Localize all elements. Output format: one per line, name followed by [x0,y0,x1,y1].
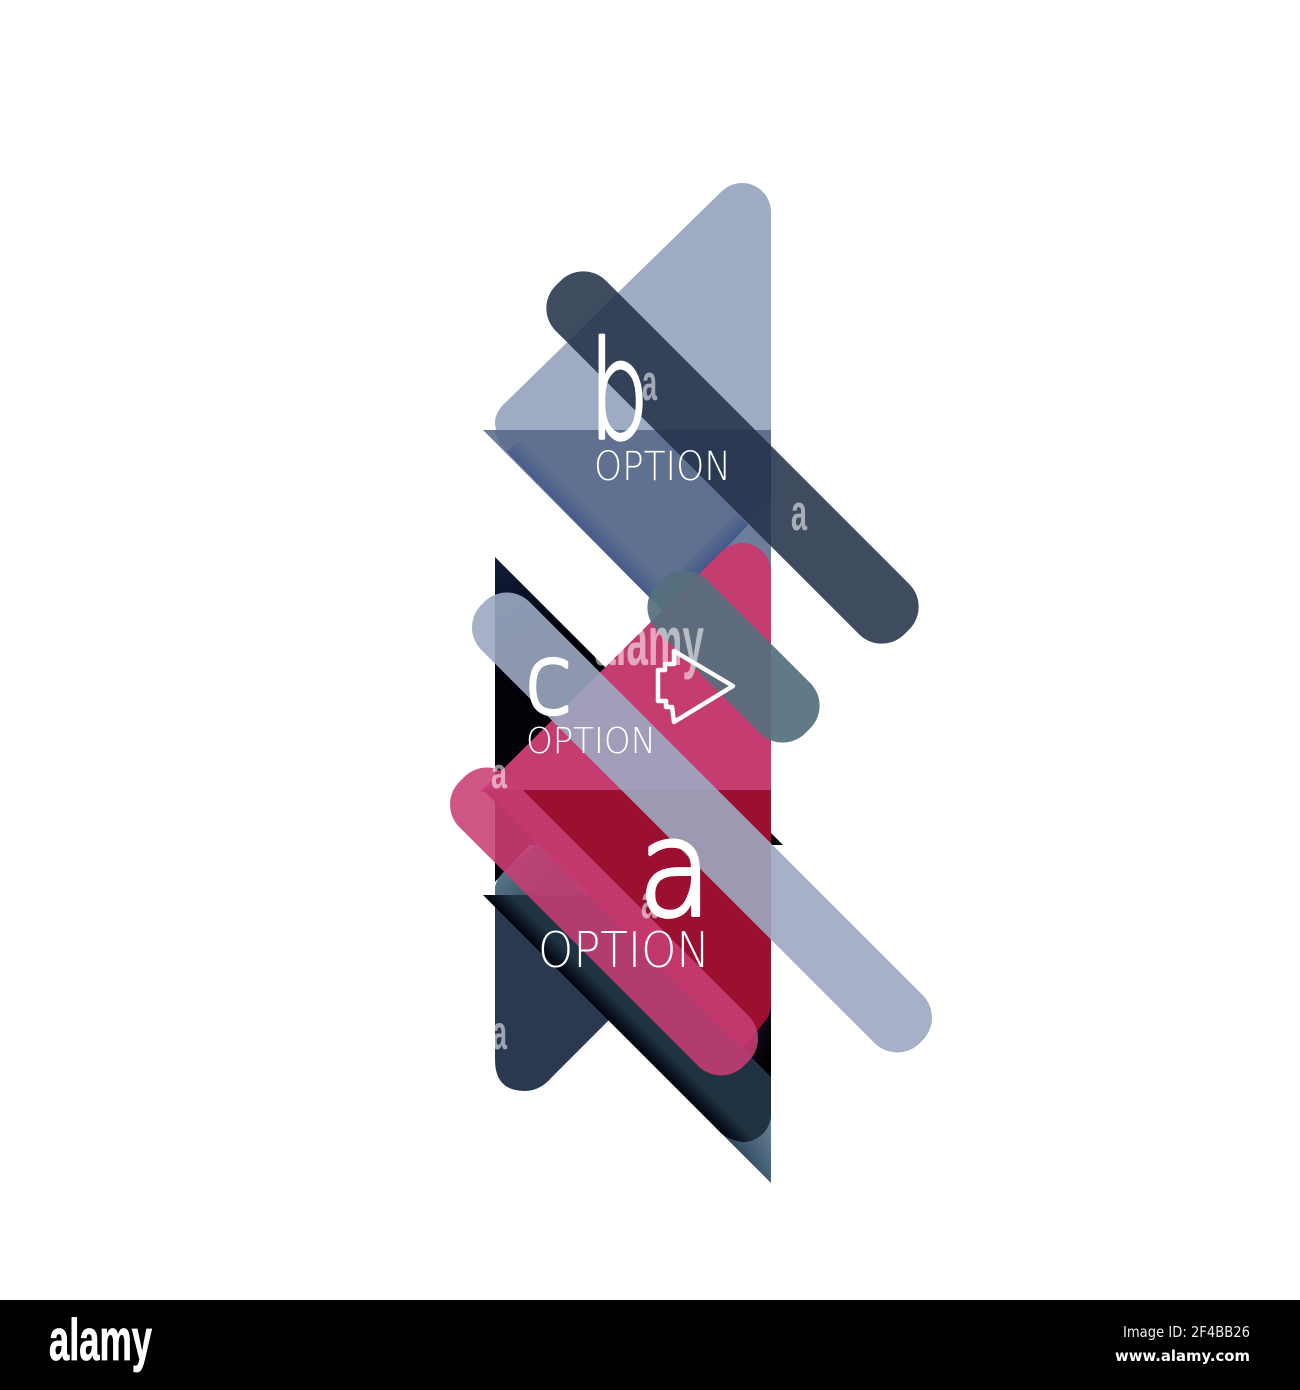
fold lower shade [680,513,748,583]
icon: outlined arrow [658,651,733,722]
letter c: c [525,623,572,736]
option b caption: OPTION [594,444,731,490]
watermark letters [491,354,807,1060]
option b label [589,313,731,490]
website: www.alamy.com [1115,1347,1250,1365]
panel: option b arrow [483,183,771,720]
panel: black back triangle [495,557,783,882]
image id: Image ID: 2F4BB26 [1123,1323,1250,1341]
letter a: a [638,793,712,947]
dark fold band [483,895,771,1142]
option c caption: OPTION [526,721,656,762]
dark slate bar [533,258,932,657]
teal rounded top [495,843,589,897]
option a label [538,793,712,979]
folded tip in shadow [735,1005,771,1078]
watermark letters: a [791,484,807,541]
panel: option lower navy arrow [483,843,771,1183]
slate triangle head [495,183,771,432]
panel: option a arrow [480,543,771,1078]
light slate bar [459,579,945,1066]
watermark letters: alamy [594,602,704,680]
footer bar [0,1300,1300,1390]
dark fold tip [715,1100,771,1183]
alamy logo: alamy [49,1308,152,1373]
navy arrow body [495,895,609,1091]
pink bar [437,754,771,1089]
watermark letters: a [641,876,657,929]
option a caption: OPTION [538,922,710,979]
dark red fold body [483,790,771,1049]
folded band rounded body [495,430,771,600]
grey teal bar [634,557,833,756]
watermark letters: a [491,749,507,798]
watermark letters: a [642,354,657,411]
folded band triangle [483,430,771,720]
letter b: b [589,313,649,470]
watermark letters: a [492,1007,507,1060]
fold left edge shade [507,437,667,600]
option c label [525,623,656,762]
shade under pink bar [483,790,742,1067]
pink triangle head [480,543,771,792]
